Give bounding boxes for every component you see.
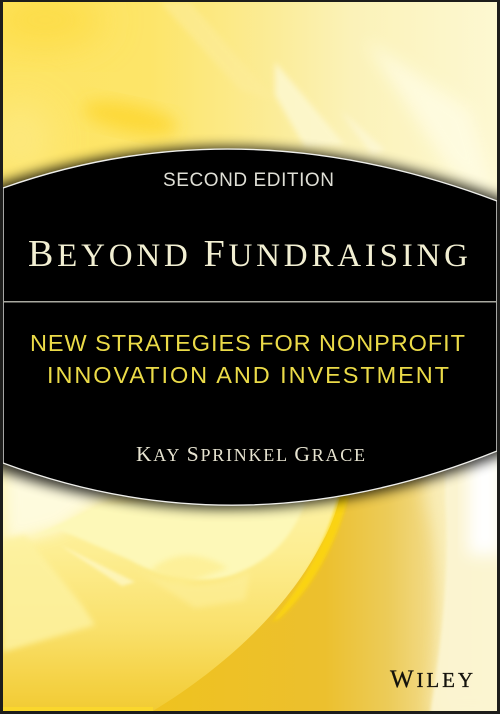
black ellipse band	[3, 149, 497, 505]
author: KAY SPRINKEL GRACE	[136, 442, 365, 466]
bright fold edge	[272, 490, 350, 622]
subtitle	[30, 330, 465, 388]
subtitle: NEW STRATEGIES FOR NONPROFIT	[30, 330, 465, 356]
top light streaks	[3, 2, 497, 200]
gold fold	[154, 476, 497, 711]
bottom swoop artwork	[0, 440, 500, 714]
title: BEYOND FUNDRAISING	[28, 233, 468, 275]
publisher logo: WILEY	[390, 666, 473, 693]
ellipse drop shadow	[0, 147, 500, 509]
subtitle: INNOVATION AND INVESTMENT	[47, 362, 449, 388]
edition label: SECOND EDITION	[163, 170, 334, 191]
divider rule	[3, 301, 497, 302]
